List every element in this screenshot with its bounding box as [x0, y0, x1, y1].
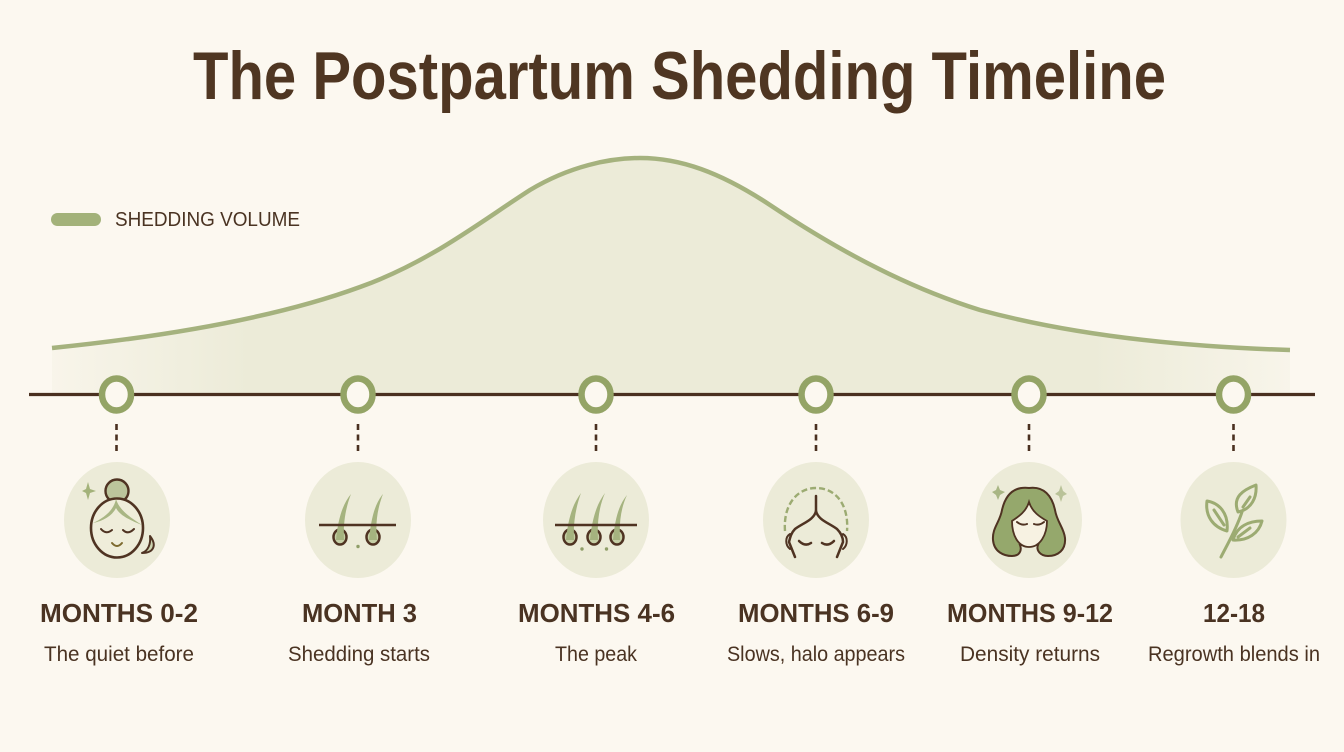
title: The Postpartum Shedding Timeline: [193, 38, 1166, 114]
milestone label: months 6-9: MONTHS 6-9: [738, 598, 894, 628]
legend: shedding volume: SHEDDING VOLUME: [115, 209, 300, 231]
dashed connectors: [116, 424, 1234, 452]
milestone label: months 0-2: MONTHS 0-2: [40, 598, 198, 628]
milestone label: month 3: [288, 598, 430, 666]
milestone label: months 9-12: [947, 598, 1113, 666]
icon: growing sprig: [1180, 462, 1286, 578]
milestone label: months 9-12: MONTHS 9-12: [947, 598, 1113, 628]
milestone label: months 0-2: The quiet before: [44, 642, 194, 666]
milestone label: month 3: Shedding starts: [288, 642, 430, 666]
icon: two hair follicles: [305, 462, 411, 578]
milestone label: months 4-6: [518, 598, 675, 666]
milestone label: months 9-12: Density returns: [960, 642, 1100, 666]
milestone label: month 3: MONTH 3: [302, 598, 417, 628]
icon: face with regrowth halo: [763, 462, 869, 578]
milestone label: months 4-6: MONTHS 4-6: [518, 598, 675, 628]
area chart: shedding volume curve: [52, 158, 1290, 393]
icon: three hair follicles: [543, 462, 649, 578]
milestone label: 12-18: 12-18: [1203, 598, 1265, 628]
icon: woman with full hair: [976, 462, 1082, 578]
milestone label: 12-18: Regrowth blends in: [1148, 642, 1320, 666]
milestone label: months 4-6: The peak: [555, 642, 637, 666]
milestone label: months 6-9: [727, 598, 905, 666]
milestone label: months 0-2: [40, 598, 198, 666]
timeline axis with milestone nodes: [29, 378, 1315, 410]
milestone label: months 6-9: Slows, halo appears: [727, 642, 905, 666]
milestone label: 12-18: [1148, 598, 1320, 666]
icon: sleeping face with bun: [64, 462, 170, 578]
